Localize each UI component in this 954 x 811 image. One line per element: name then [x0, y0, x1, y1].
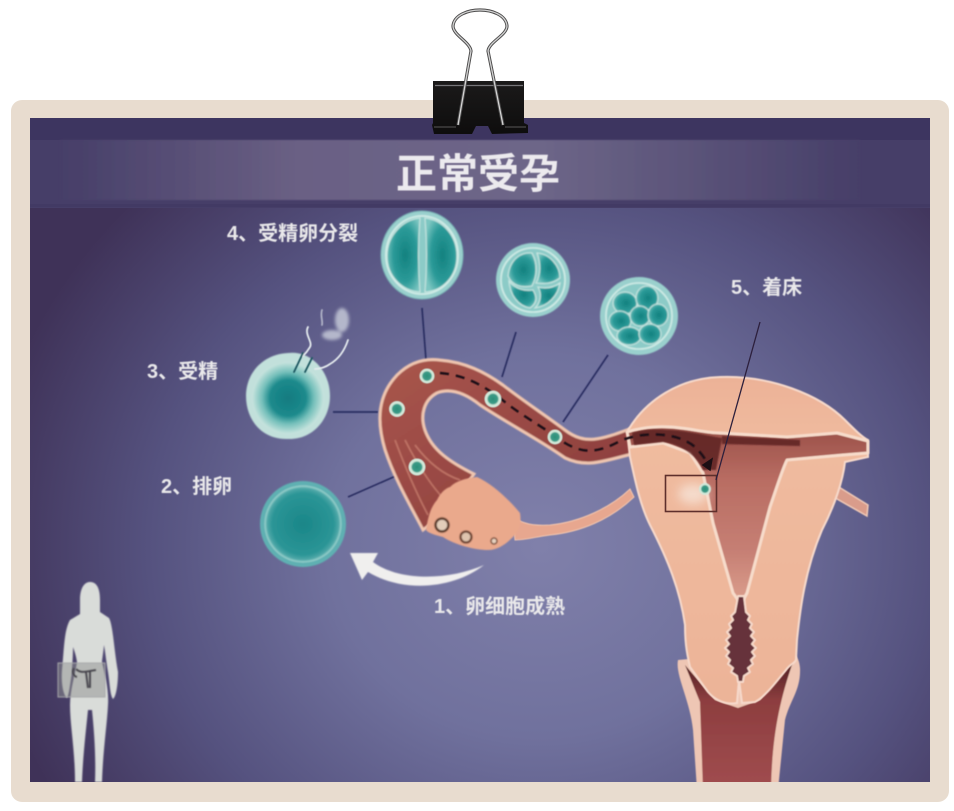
arrow head	[703, 459, 712, 470]
cell: ovulated egg	[260, 481, 346, 567]
central gap between lobes	[739, 680, 742, 704]
clip highlight	[435, 84, 523, 86]
leader lines	[333, 308, 608, 497]
figure pelvis box	[58, 663, 105, 697]
ligament	[512, 489, 634, 540]
clip lip highlight	[434, 126, 526, 128]
sperm wisp	[322, 308, 349, 340]
title: 正常受孕	[396, 151, 560, 197]
path of the egg: dashed arrow	[440, 373, 708, 466]
implantation site highlight	[678, 484, 708, 504]
cervical canal with folds	[725, 596, 756, 682]
panel: illustration background	[30, 118, 930, 782]
cavity dark channel	[632, 429, 800, 470]
label: step 3: 3、受精	[147, 360, 218, 383]
sperm trails	[294, 310, 348, 372]
cell: fertilized egg	[246, 353, 330, 439]
label: step 2: 2、排卵	[161, 475, 232, 498]
right round ligament	[830, 484, 868, 516]
clip body	[432, 81, 528, 134]
vagina	[678, 650, 800, 790]
label: step 4: 4、受精卵分裂	[227, 222, 358, 245]
clip wire handle	[453, 10, 507, 125]
uterine cavity	[627, 427, 868, 604]
uterus	[627, 377, 868, 703]
binder clip	[432, 10, 528, 134]
cell: four-cell stage	[496, 243, 570, 317]
label: step 1: 1、卵细胞成熟	[434, 594, 565, 618]
leader line: step 5	[716, 322, 760, 480]
fallopian tube	[380, 360, 642, 530]
implantation box	[666, 476, 716, 512]
cell: two-cell stage	[381, 211, 463, 299]
small cells in the tube	[389, 368, 711, 495]
female figure	[62, 582, 118, 782]
cell: eight-cell stage	[600, 277, 678, 355]
label: step 5: 5、着床	[731, 275, 802, 299]
white curved arrow	[350, 553, 484, 586]
ovary	[426, 477, 521, 550]
